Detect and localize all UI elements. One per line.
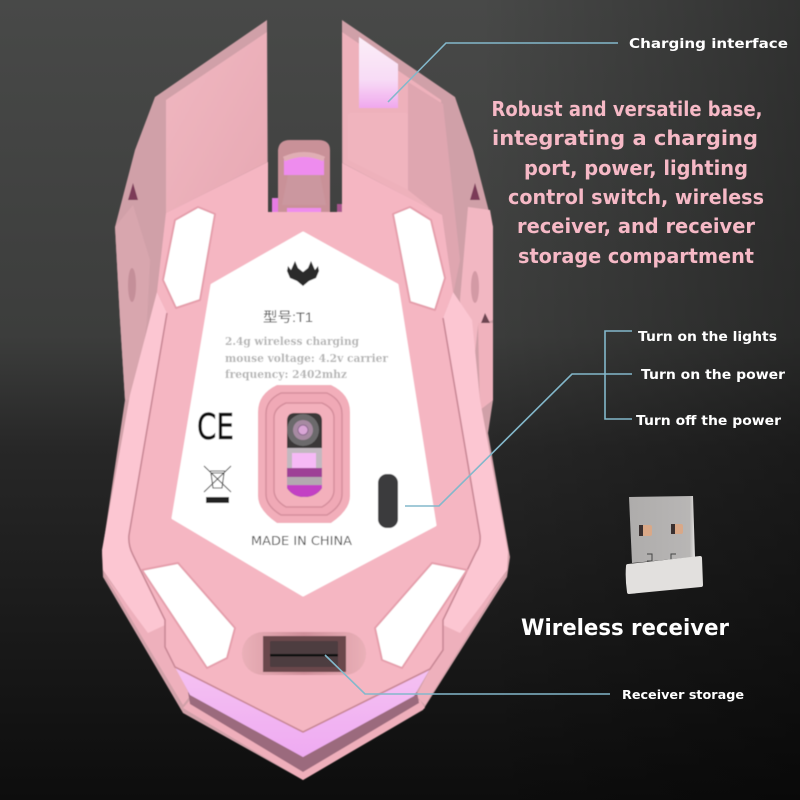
right side piece [460,183,493,410]
right wall panel [342,32,447,218]
bottom lip [183,700,425,780]
label: receiver storage: Receiver storage [622,688,744,702]
left side piece [115,183,150,400]
description paragraph: receiver, and receiver [517,214,755,238]
right light strip [443,292,508,640]
charging port light [359,37,398,108]
optical sensor [258,385,350,523]
description paragraph: storage compartment [518,244,754,268]
description paragraph: integrating a charging [492,126,758,150]
white pad top right [393,207,445,310]
central plate [129,162,480,732]
specification text: 2.4g wireless charging [225,335,359,348]
purple glow [175,667,430,757]
label: wireless receiver: Wireless receiver [521,616,729,641]
label: turn on the power: Turn on the power [641,368,786,383]
receiver storage slot [242,632,366,675]
specification text: frequency: 2402mhz [225,368,347,381]
description paragraph: control switch, wireless [508,185,764,209]
made in china: MADE IN CHINA [251,534,353,548]
WEEE recycling icon [204,466,231,503]
scroll wheel [272,140,342,212]
description paragraph [492,97,764,268]
lower right flank [416,572,507,705]
mouse underside illustration [102,20,510,780]
lower left flank [103,572,190,705]
white pad top left [163,207,215,308]
brand logo [287,261,319,286]
left light strip [102,292,167,640]
white label plate [173,233,435,595]
specification text: mouse voltage: 4.2v carrier [225,352,388,365]
power switch [378,474,398,528]
callout line: receiver storage [325,655,610,694]
label: charging interface: Charging interface [629,37,788,52]
mouse silhouette [102,20,510,780]
white pad bottom left [142,563,235,668]
description paragraph: Robust and versatile base, [492,97,762,121]
label: turn on the lights: Turn on the lights [638,330,777,345]
white pad bottom right [375,563,467,668]
right darker column [408,82,460,300]
label: turn off the power: Turn off the power [636,414,782,429]
CE mark: CE [197,407,234,448]
description paragraph: port, power, lighting [524,156,748,180]
charging port block [348,113,408,190]
callout line: switch bracket [405,331,632,506]
callout line: charging interface [388,43,618,102]
dark band under glow [188,692,419,772]
plate edge lines [129,313,480,732]
specification text [225,335,388,381]
model number: 型号:T1 [263,309,313,325]
wireless receiver dongle [626,496,703,594]
left wall panel [166,32,267,213]
